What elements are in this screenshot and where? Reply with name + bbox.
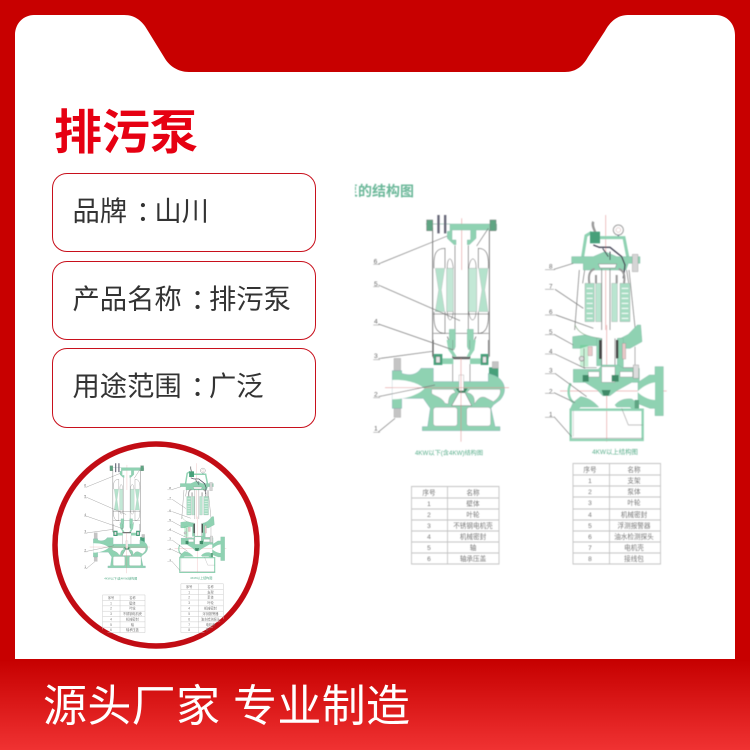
parts table: above 4KW: 油水检测探头 (614, 532, 654, 541)
pump diagram: above 4KW: 8 (549, 263, 553, 270)
parts table: below 4KW (412, 486, 499, 564)
parts table: above 4KW: 1 (588, 478, 592, 485)
parts table: below 4KW: 轴 (470, 543, 477, 552)
caption: below 4KW: 4KW以下(含4KW)结构图 (415, 449, 483, 457)
parts table: above 4KW: 电机壳 (624, 543, 644, 552)
spec row: product name (52, 261, 316, 340)
slogan: 源头厂家 专业制造 (43, 682, 410, 731)
parts table: above 4KW: 接线包 (624, 554, 644, 563)
spec row: brand: ： (136, 195, 163, 226)
parts table: above 4KW: 2 (588, 489, 592, 496)
parts table: above 4KW: 6 (588, 534, 592, 541)
structure diagram (344, 183, 667, 564)
parts table: above 4KW: 3 (588, 500, 592, 507)
pump diagram: above 4KW: 5 (549, 329, 553, 336)
parts table: below 4KW: 4 (427, 534, 431, 541)
pump diagram: above 4KW: 2 (549, 388, 553, 395)
pump diagram: below 4KW: 5 (374, 281, 378, 288)
pump diagram: above 4KW: 3 (549, 368, 553, 375)
spec row: usage: ： (191, 370, 218, 401)
spec row: brand (52, 173, 316, 252)
parts table: below 4KW: 名称 (466, 488, 480, 497)
pump diagram: below 4KW: 6 (374, 258, 378, 265)
spec row: usage: 用途范围 广泛 (72, 370, 264, 401)
spec row: product name: ： (191, 283, 218, 314)
pump diagram: below 4KW: 1 (374, 426, 378, 433)
parts table: above 4KW: 4 (588, 512, 592, 519)
parts table: below 4KW: 5 (427, 545, 431, 552)
pump diagram: below 4KW: 4 (374, 318, 378, 325)
parts table: above 4KW: 支架 (627, 476, 641, 485)
parts table: above 4KW: 8 (588, 556, 592, 563)
title: 排污泵 (54, 107, 198, 160)
spec row: brand: 品牌 山川 (72, 195, 209, 226)
parts table: below 4KW: 1 (427, 501, 431, 508)
parts table: below 4KW: 壁体 (466, 499, 480, 508)
pump diagram: above 4KW: 4 (549, 348, 553, 355)
parts table: above 4KW: 5 (588, 523, 592, 530)
pump diagram: above 4KW: 6 (549, 309, 553, 316)
parts table: below 4KW: 机械密封 (460, 532, 487, 541)
pump diagram: above 4KW: 1 (549, 412, 553, 419)
circular thumbnail (55, 444, 257, 646)
parts table: above 4KW (573, 464, 660, 564)
spec row: usage (52, 348, 316, 428)
diagram heading: 泵的结构图 (344, 183, 414, 199)
parts table: below 4KW: 6 (427, 556, 431, 563)
pump diagram: below 4KW: 3 (374, 353, 378, 360)
parts table: above 4KW: 叶轮 (627, 498, 641, 507)
parts table: above 4KW: 浮测报警器 (618, 521, 651, 530)
pump diagram: above 4KW: 7 (549, 283, 553, 290)
parts table: below 4KW: 2 (427, 512, 431, 519)
parts table: below 4KW: 3 (427, 523, 431, 530)
parts table: below 4KW: 序号 (422, 488, 436, 497)
pump diagram: below 4KW (373, 215, 509, 442)
parts table: above 4KW: 7 (588, 545, 592, 552)
spec row: product name: 产品名称 排污泵 (72, 283, 291, 314)
parts table: above 4KW: 机械密封 (621, 510, 648, 519)
parts table: below 4KW: 不锈钢电机壳 (453, 521, 493, 530)
pump diagram: below 4KW: 2 (374, 392, 378, 399)
parts table: above 4KW: 名称 (627, 465, 641, 474)
pump diagram: above 4KW (545, 215, 667, 442)
parts table: below 4KW: 轴承压盖 (460, 554, 487, 563)
caption: above 4KW: 4KW以上结构图 (592, 447, 638, 456)
parts table: above 4KW: 序号 (583, 465, 597, 474)
parts table: above 4KW: 泵体 (627, 487, 641, 496)
parts table: below 4KW: 叶轮 (466, 510, 480, 519)
